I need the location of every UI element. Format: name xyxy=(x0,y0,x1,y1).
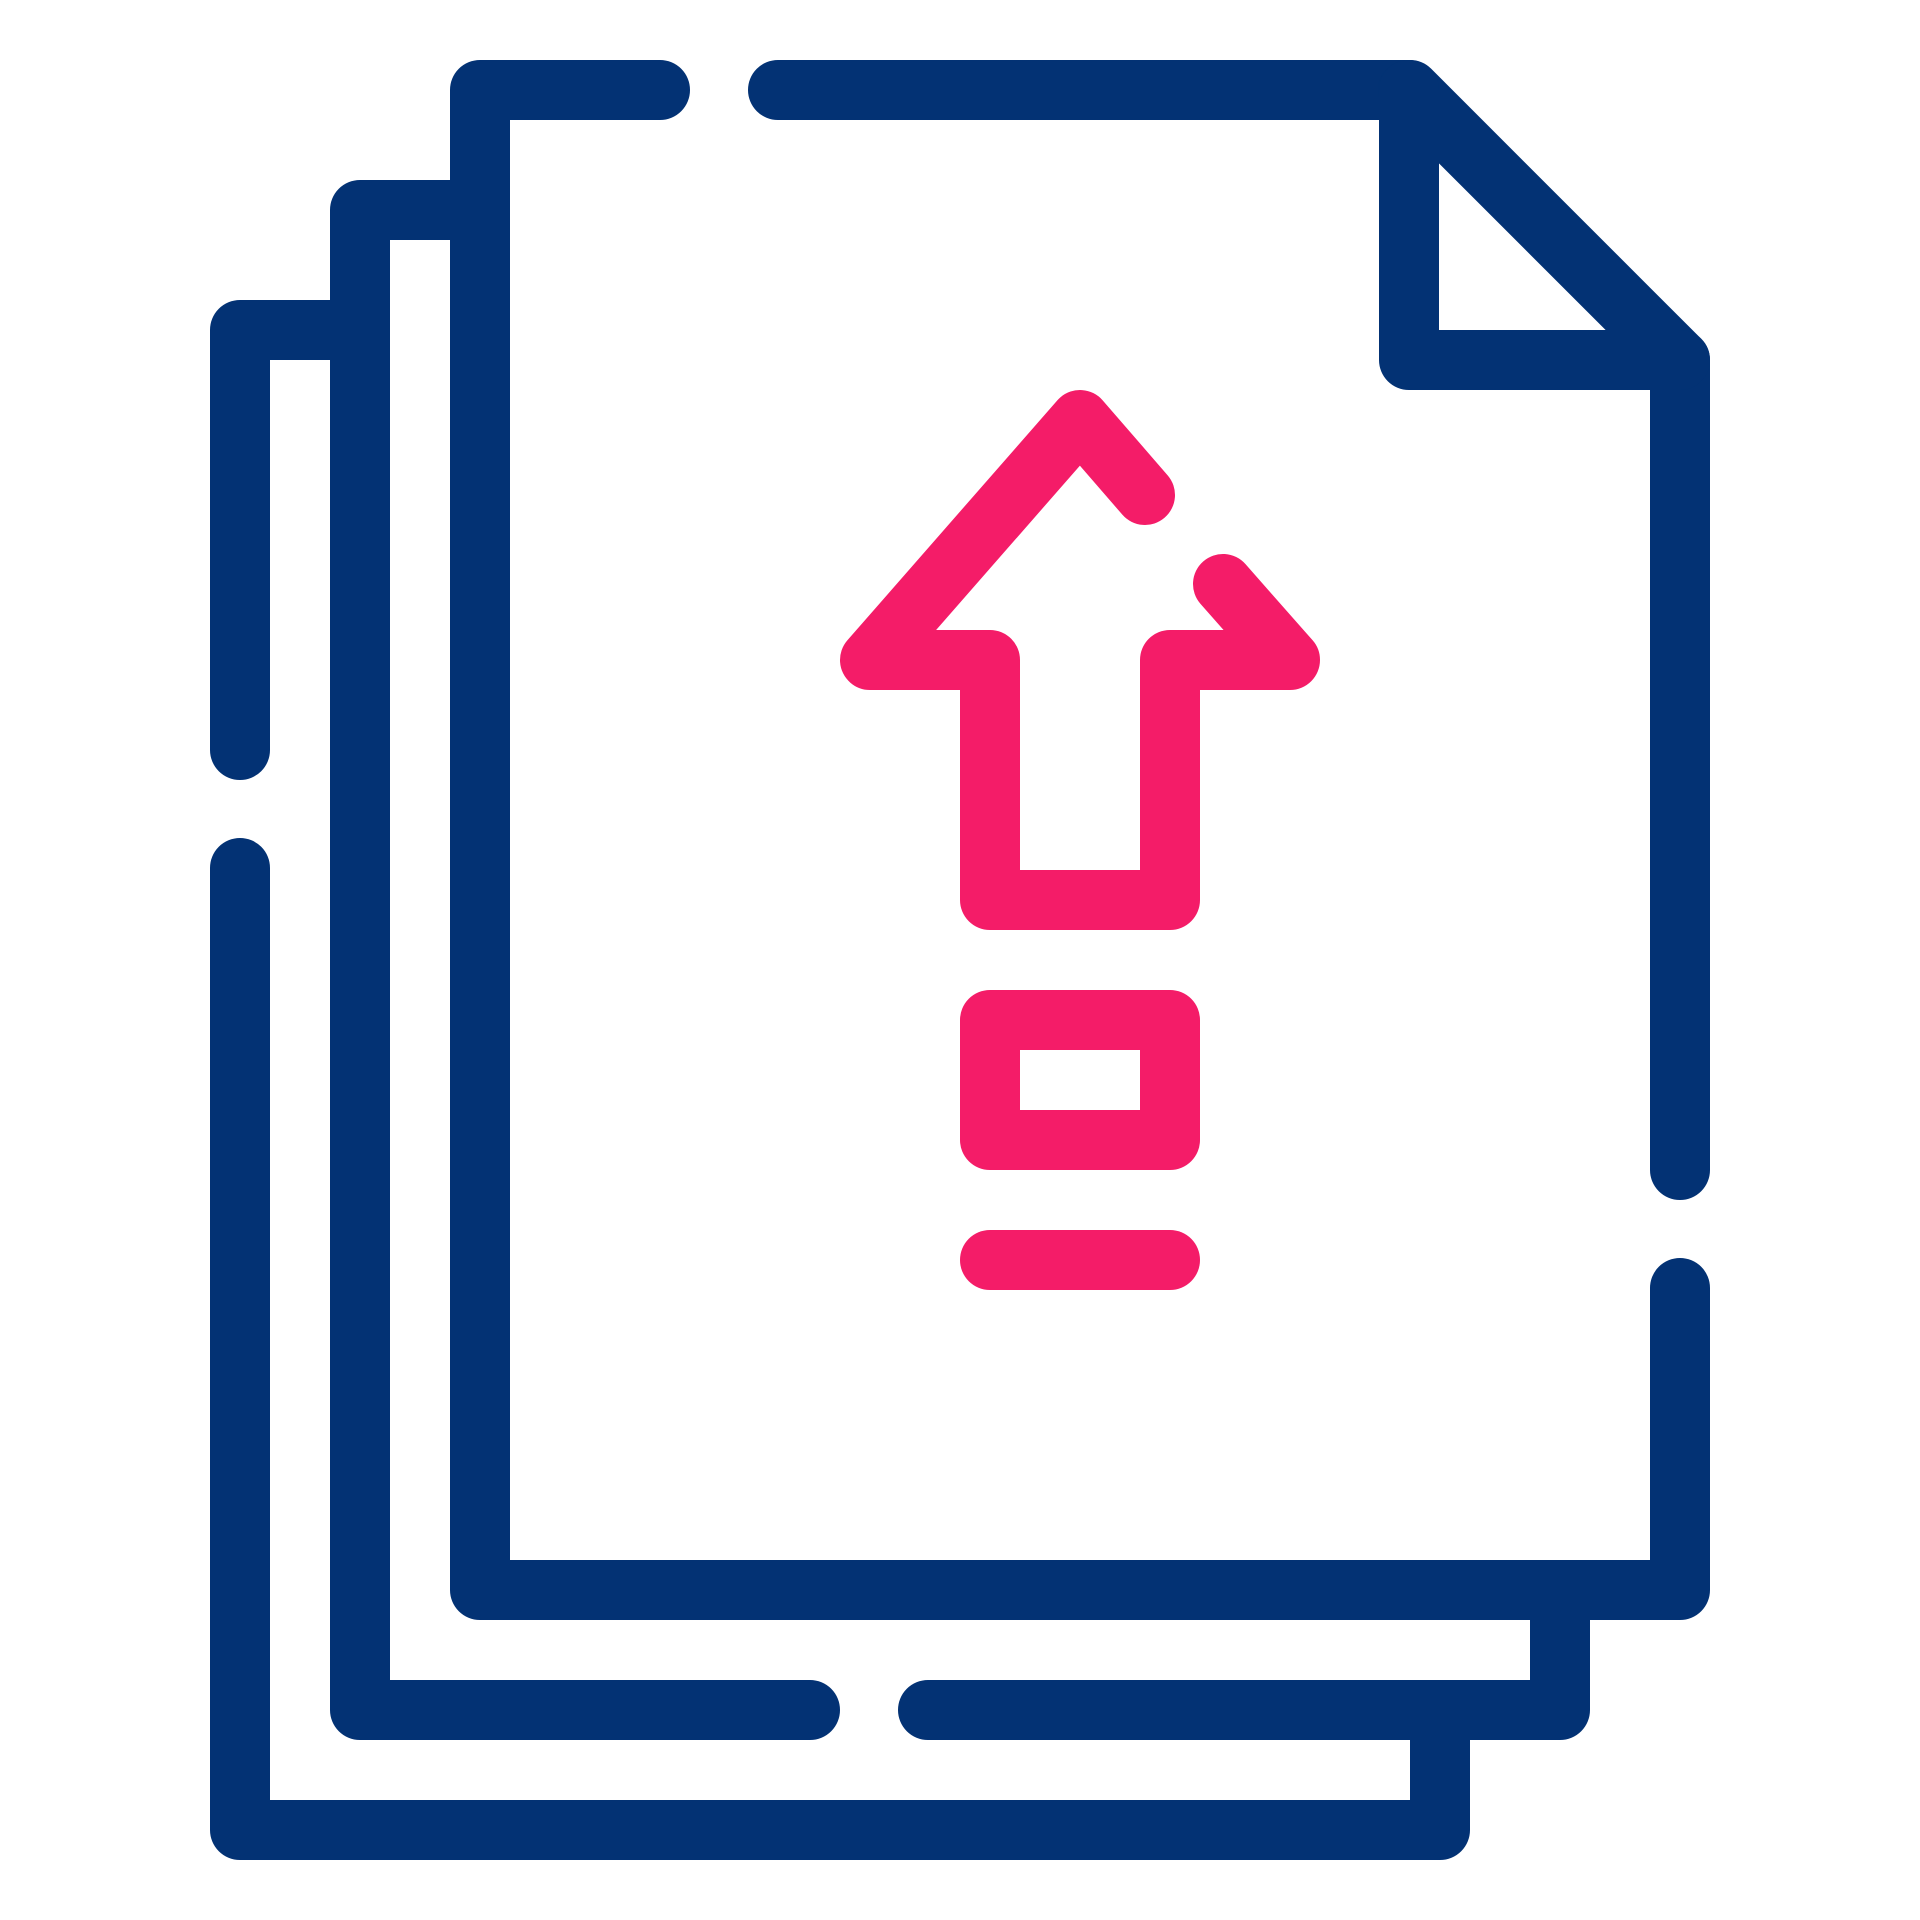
middle document outline xyxy=(360,210,1560,1710)
back document outline xyxy=(240,330,1440,1830)
icon: upload arrow and bars xyxy=(870,420,1290,1260)
line bar xyxy=(990,1230,1170,1290)
front document folded corner xyxy=(1409,90,1680,360)
upload arrow xyxy=(870,420,1290,900)
rectangular bar xyxy=(990,1020,1170,1140)
icon: stack of three documents xyxy=(240,90,1680,1830)
front document outline xyxy=(480,90,1680,1590)
